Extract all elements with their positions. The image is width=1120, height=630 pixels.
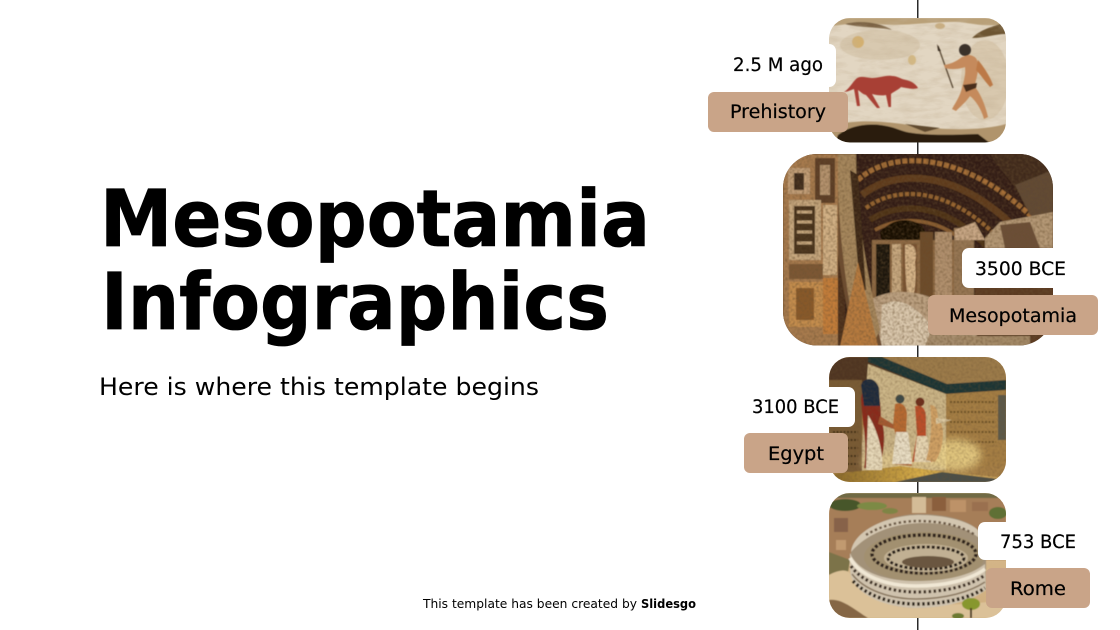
label: Prehistory: Prehistory bbox=[730, 102, 826, 123]
subtitle: Here is where this template begins bbox=[99, 373, 539, 401]
image: painted tomb wall bbox=[829, 357, 1006, 482]
label: 2.5 M ago: 2.5 M ago bbox=[733, 55, 823, 76]
title bbox=[100, 175, 650, 348]
label: 3100 BCE bbox=[745, 387, 855, 427]
label: 2.5 M ago bbox=[700, 44, 836, 87]
image: cave painting bbox=[829, 18, 1009, 143]
title: Mesopotamia bbox=[100, 175, 650, 265]
credit line: This template has been created by bbox=[422, 596, 638, 611]
label: Rome: Rome bbox=[1010, 579, 1066, 600]
label: Mesopotamia: Mesopotamia bbox=[949, 306, 1077, 327]
panel: egypt bbox=[744, 357, 1006, 482]
panel: prehistory bbox=[700, 18, 1009, 143]
label: Rome bbox=[986, 568, 1090, 608]
label: Mesopotamia bbox=[928, 295, 1098, 335]
label: 3500 BCE bbox=[962, 248, 1066, 288]
image: colosseum bbox=[829, 493, 1007, 619]
credit line: Slidesgo bbox=[641, 596, 696, 611]
label: 3100 BCE: 3100 BCE bbox=[752, 397, 839, 418]
label: Egypt: Egypt bbox=[768, 444, 824, 465]
label: Egypt bbox=[744, 433, 848, 473]
panel: mesopotamia bbox=[783, 154, 1098, 346]
image: carved arched corridor bbox=[783, 154, 1053, 346]
title: Infographics bbox=[101, 258, 609, 348]
label: 3500 BCE: 3500 BCE bbox=[975, 259, 1066, 280]
label: 753 BCE bbox=[978, 522, 1076, 560]
label: Prehistory bbox=[708, 92, 848, 132]
label: 753 BCE: 753 BCE bbox=[1000, 532, 1076, 553]
timeline line bbox=[917, 0, 918, 630]
panel: rome bbox=[829, 493, 1090, 619]
